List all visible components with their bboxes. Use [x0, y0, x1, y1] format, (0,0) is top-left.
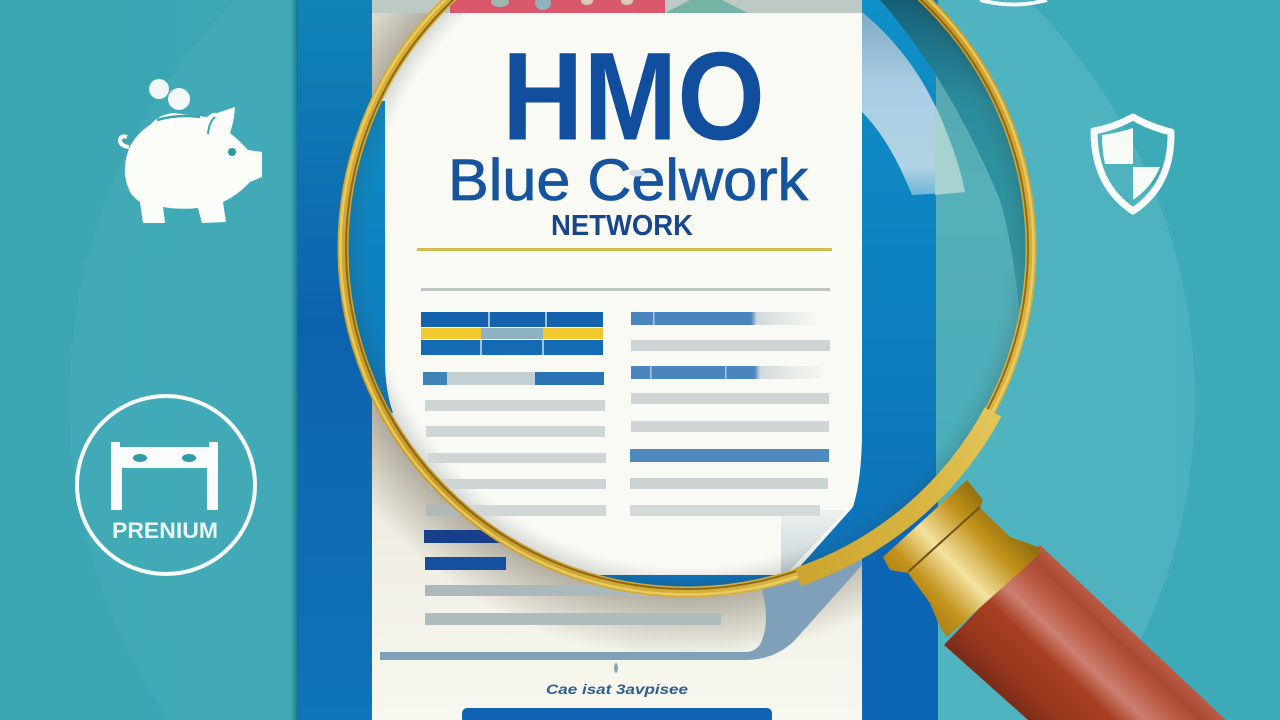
premium label: PRENIUM	[112, 518, 218, 543]
icon: piggy bank	[120, 79, 262, 223]
shadow cast by the lens on page	[372, 13, 862, 651]
icon: premium badge	[77, 396, 255, 574]
tail	[120, 136, 129, 147]
coin slot	[157, 116, 200, 120]
panel: document page	[372, 13, 862, 720]
lens backdrop	[348, 0, 936, 586]
magnifying glass lens contents	[340, 0, 1040, 600]
magnifying glass ring	[343, 0, 1031, 592]
network label: NETWORK	[551, 210, 693, 242]
panel edge shadow	[288, 0, 298, 720]
caption text: Cae isat 3avpisee	[546, 681, 688, 697]
glass dark rim	[880, 0, 1026, 310]
icon: partial circle top	[980, 0, 1047, 4]
ring dark line	[346, 0, 1028, 589]
coin large	[168, 88, 190, 110]
rim shadow	[348, 0, 1026, 587]
collar groove	[908, 507, 980, 572]
lower document rows	[424, 479, 725, 625]
ear crease	[208, 117, 215, 134]
shield quarter lower	[1133, 167, 1160, 200]
magnifying glass handle	[883, 480, 1226, 720]
fold shadow and line	[380, 540, 862, 660]
blue button	[462, 708, 772, 720]
panel: blue backing sheet	[298, 0, 938, 720]
grey divider	[421, 288, 830, 291]
icon: shield	[1094, 117, 1171, 211]
title: HMO: HMO	[502, 28, 765, 166]
ring gold band	[798, 412, 993, 577]
subtitle: Blue Celwork	[448, 148, 809, 213]
subtitle lens smudge	[629, 170, 645, 176]
wooden handle	[944, 545, 1226, 720]
magnified paper	[340, 13, 862, 575]
shield quarter upper	[1102, 128, 1133, 164]
gate hole left	[133, 454, 147, 462]
gold collar	[883, 480, 1041, 637]
glass teal section	[936, 76, 1020, 476]
glass highlight right part	[935, 105, 965, 195]
ring highlight line	[340, 0, 1034, 594]
glass pale highlight	[862, 12, 935, 195]
gate symbol	[111, 442, 218, 510]
gold divider	[417, 248, 832, 251]
blue panel section below lens	[862, 440, 938, 720]
document top strip	[372, 0, 862, 13]
gate hole right	[182, 454, 196, 462]
eye	[228, 148, 236, 156]
table right	[630, 312, 830, 516]
table left	[421, 312, 606, 516]
coin small	[149, 79, 169, 99]
caption marker	[614, 663, 618, 673]
page curl	[781, 510, 847, 575]
